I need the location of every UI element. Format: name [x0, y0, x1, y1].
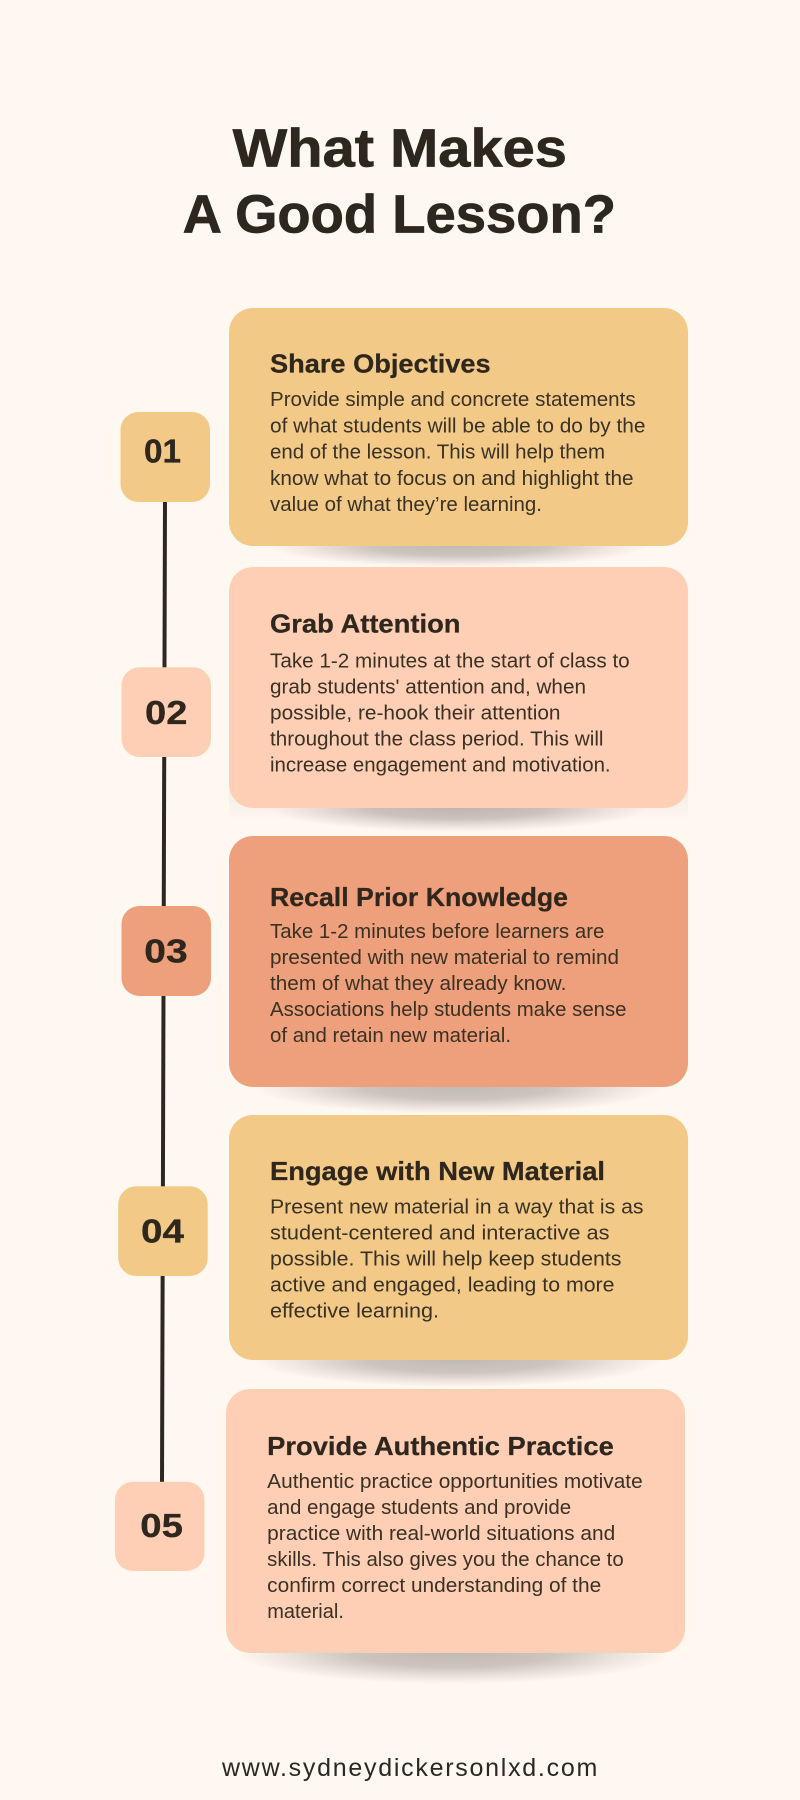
- heading: engage with new material: Engage with New Material: [270, 1156, 605, 1186]
- panel: share objectives: [229, 308, 688, 546]
- text: provide authentic practice: practice with real-world situations and: [267, 1523, 615, 1545]
- text: share objectives: end of the lesson. This will help them: [270, 441, 605, 463]
- text: engage with new material: active and engaged, leading to more: [270, 1274, 614, 1296]
- step 03: [122, 836, 688, 1114]
- badge 01: 01: [144, 434, 181, 471]
- text: provide authentic practice: Authentic practice opportunities motivate: [267, 1471, 643, 1493]
- footer url: www.sydneydickersonlxd.com: [221, 1754, 597, 1782]
- badge 02: 02: [145, 695, 187, 732]
- text: grab attention: possible, re-hook their attention: [270, 702, 560, 724]
- badge 04: 04: [141, 1214, 184, 1251]
- text: engage with new material: student-centered and interactive as: [270, 1222, 610, 1244]
- step 02: [122, 567, 688, 832]
- card shadow 01: [268, 525, 648, 567]
- text: engage with new material: [270, 1196, 644, 1322]
- panel: engage with new material: [229, 1115, 688, 1360]
- card shadow 04: [253, 1333, 663, 1387]
- card shadow 02: [229, 780, 688, 832]
- panel: recall prior knowledge: [229, 836, 688, 1087]
- text: engage with new material: Present new material in a way that is as: [270, 1196, 644, 1218]
- text: share objectives: of what students will be able to do by the: [270, 415, 646, 437]
- heading: recall prior knowledge: Recall Prior Knowledge: [270, 882, 568, 912]
- panel: grab attention: [229, 567, 688, 808]
- badge 05: 05: [140, 1508, 183, 1545]
- text: recall prior knowledge: of and retain new material.: [270, 1025, 511, 1047]
- badge 02: [122, 667, 211, 757]
- heading: provide authentic practice: Provide Authentic Practice: [267, 1431, 614, 1461]
- text: recall prior knowledge: Associations help students make sense: [270, 999, 626, 1021]
- text: grab attention: increase engagement and motivation.: [270, 754, 611, 776]
- badge 01: [120, 412, 210, 502]
- text: recall prior knowledge: presented with new material to remind: [270, 947, 619, 969]
- text: provide authentic practice: confirm correct understanding of the: [267, 1575, 601, 1597]
- text: share objectives: [270, 389, 646, 516]
- timeline connector line: [162, 500, 165, 1484]
- text: provide authentic practice: material.: [267, 1601, 344, 1623]
- heading: grab attention: Grab Attention: [270, 609, 460, 639]
- text: engage with new material: effective learning.: [270, 1300, 439, 1322]
- text: recall prior knowledge: Take 1-2 minutes before learners are: [270, 921, 604, 943]
- heading: share objectives: Share Objectives: [270, 349, 491, 379]
- badge 03: 03: [144, 934, 188, 971]
- text: provide authentic practice: skills. This also gives you the chance to: [267, 1549, 624, 1571]
- badge 04: [118, 1186, 208, 1276]
- text: recall prior knowledge: [270, 921, 626, 1047]
- panel: provide authentic practice: [226, 1389, 685, 1653]
- text: share objectives: Provide simple and concrete statements: [270, 389, 636, 411]
- title: [183, 119, 616, 245]
- title: What Makes: [233, 119, 567, 179]
- text: grab attention: [270, 650, 630, 776]
- text: share objectives: know what to focus on and highlight the: [270, 468, 634, 490]
- text: provide authentic practice: and engage students and provide: [267, 1497, 571, 1519]
- text: recall prior knowledge: them of what they already know.: [270, 973, 566, 995]
- badge 05: [115, 1482, 204, 1571]
- card shadow 03: [253, 1060, 663, 1114]
- badge 03: [122, 906, 211, 996]
- text: grab attention: grab students' attention and, when: [270, 676, 586, 698]
- text: grab attention: throughout the class period. This will: [270, 728, 604, 750]
- card shadow 05: [235, 1622, 671, 1684]
- text: grab attention: Take 1-2 minutes at the start of class to: [270, 650, 630, 672]
- text: provide authentic practice: [267, 1471, 643, 1623]
- step 01: [120, 308, 688, 567]
- text: engage with new material: possible. This will help keep students: [270, 1248, 622, 1270]
- title: A Good Lesson?: [183, 185, 616, 245]
- step 04: [118, 1115, 688, 1387]
- text: share objectives: value of what they’re learning.: [270, 494, 542, 516]
- step 05: [115, 1389, 685, 1684]
